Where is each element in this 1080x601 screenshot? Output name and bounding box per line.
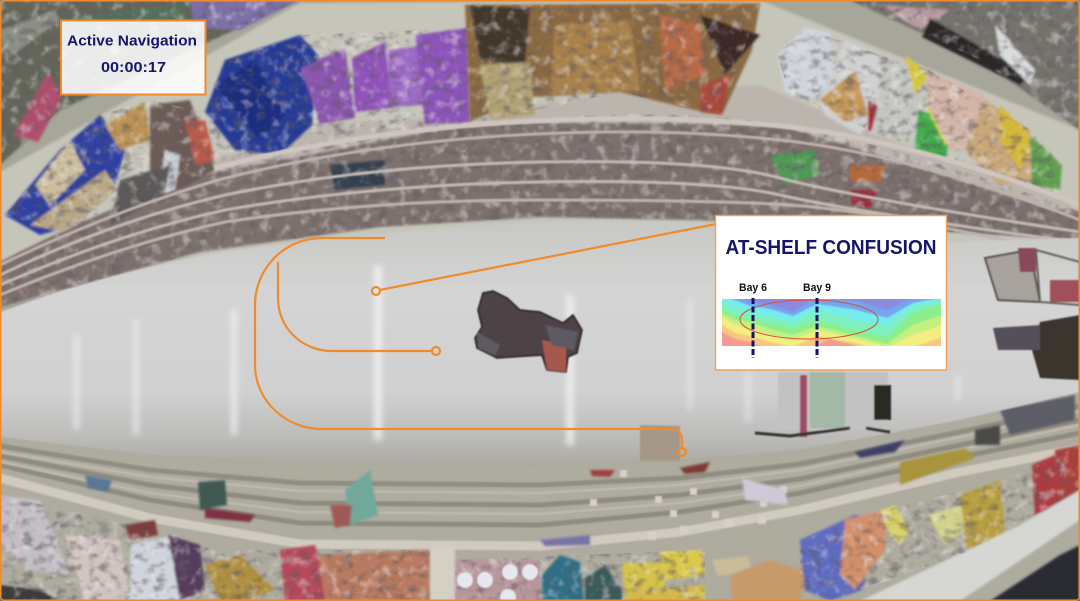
bay 9 marker (816, 298, 818, 358)
highlight ellipse (740, 300, 878, 339)
callout anchor (372, 287, 380, 295)
bay 6 label: Bay 6 (739, 282, 767, 294)
bottom shelf tiers (0, 406, 1080, 546)
bottom shelf items (85, 395, 1075, 546)
lower tags (590, 470, 787, 540)
panel: active navigation timer (61, 20, 206, 94)
path endpoint: shelf (678, 448, 686, 456)
wire display rack (755, 372, 891, 437)
store floor (0, 220, 1080, 465)
blue and tan bags left (5, 100, 215, 235)
shelf band (0, 114, 1080, 307)
path endpoint: aisle (432, 347, 440, 355)
upper left racks (0, 0, 300, 165)
path line: narrow navigation (278, 262, 432, 351)
bottom centre and right products (430, 445, 1080, 601)
heading: active navigation: Active Navigation (67, 32, 197, 50)
brown bags (465, 3, 760, 122)
panel: at-shelf confusion (716, 216, 946, 370)
heatmap (718, 296, 945, 358)
wire mesh shelf (215, 85, 1070, 215)
floor light reflections (73, 265, 961, 445)
bottom left products (0, 495, 430, 601)
upper shelf ledge (0, 0, 1080, 300)
bay 6 marker (752, 298, 754, 358)
navy bags (205, 35, 318, 155)
cardboard box (640, 425, 680, 461)
bay 9 label: Bay 9 (803, 282, 831, 294)
round tins (457, 564, 538, 601)
purple bags (300, 28, 470, 124)
upper shelf rails (0, 119, 1080, 295)
shopping cart right (985, 248, 1080, 305)
shelf colour accents (330, 150, 885, 208)
yellow green snacks (870, 55, 1062, 190)
timer: 00:00:17 (101, 59, 166, 76)
lower shelf base (0, 392, 1080, 600)
white bags (777, 28, 888, 135)
upper right racks (850, 0, 1080, 130)
shopper silhouette (475, 291, 582, 372)
callout leader line (380, 224, 716, 290)
heading: at-shelf confusion: AT-SHELF CONFUSION (726, 237, 936, 259)
shopper right (993, 315, 1080, 380)
path line: wide navigation (255, 238, 682, 448)
